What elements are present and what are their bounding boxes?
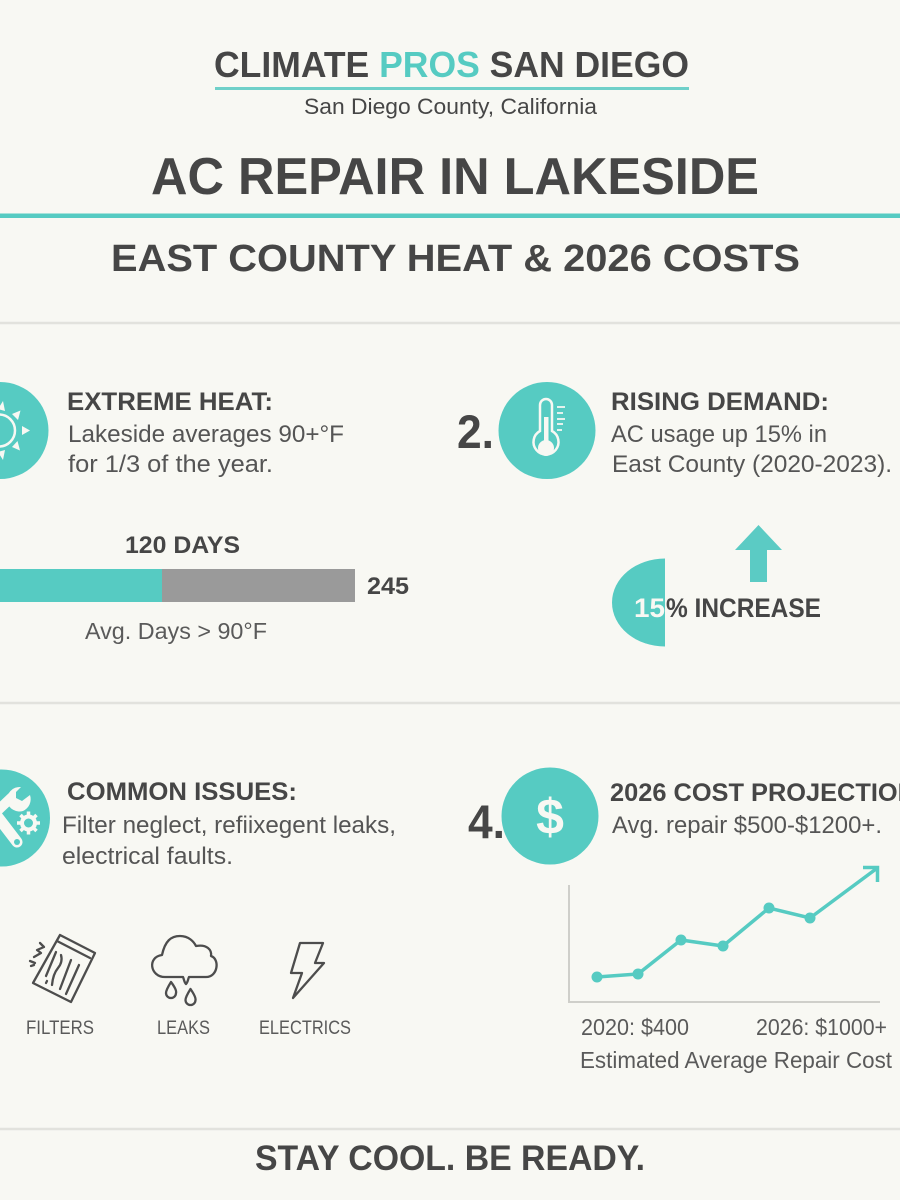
footer tagline: STAY COOL. BE READY. xyxy=(255,1139,645,1178)
body text: Filter neglect, refiixegent leaks, xyxy=(62,812,396,839)
header: brand block xyxy=(214,44,689,119)
body text: electrical faults. xyxy=(62,843,233,870)
label: 15% increase: % INCREASE xyxy=(666,593,821,623)
chart labels: 2020: $400 xyxy=(581,1014,689,1040)
icon: wrench and gear xyxy=(0,770,50,866)
icon: dollar: $ xyxy=(536,789,564,845)
bar chart: days above 90F: 245 xyxy=(367,573,409,600)
number 2: 2. xyxy=(457,405,494,458)
body text: AC usage up 15% in xyxy=(611,421,827,448)
body text: Lakeside averages 90+°F xyxy=(68,421,344,448)
body text: East County (2020-2023). xyxy=(612,451,892,478)
icon: sun xyxy=(0,382,48,479)
body text xyxy=(62,812,396,870)
body text: Avg. repair $500-$1200+. xyxy=(612,812,882,839)
icon: lightning bolt xyxy=(291,943,324,998)
arrow: increase xyxy=(735,525,782,582)
icon: thermometer xyxy=(498,382,596,479)
icon labels xyxy=(26,1018,351,1039)
bar chart: days above 90F: 120 DAYS xyxy=(125,532,240,559)
heading: RISING DEMAND: xyxy=(611,388,829,416)
half-disc: 15 percent xyxy=(612,558,665,646)
body text: for 1/3 of the year. xyxy=(68,451,273,478)
brand name: CLIMATE PROS SAN DIEGO xyxy=(214,44,689,85)
heading: COMMON ISSUES: xyxy=(67,778,297,806)
bar chart: days above 90F: Avg. Days > 90°F xyxy=(85,618,267,644)
secondary title: EAST COUNTY HEAT & 2026 COSTS xyxy=(111,238,800,280)
icon labels: ELECTRICS xyxy=(259,1018,351,1039)
brand underline xyxy=(215,87,689,90)
panel: common issues xyxy=(0,770,396,1039)
icon labels: LEAKS xyxy=(157,1018,210,1039)
label: 15% increase: 15 xyxy=(634,593,665,623)
icon: cloud with drops xyxy=(152,936,217,1005)
chart labels xyxy=(580,1014,893,1073)
body text xyxy=(611,421,892,478)
chart labels: Estimated Average Repair Cost xyxy=(580,1047,893,1073)
heading: EXTREME HEAT: xyxy=(67,388,273,416)
icon: dollar xyxy=(502,768,598,864)
panel: 2026 cost projection xyxy=(468,768,900,1073)
bar chart: days above 90F xyxy=(0,532,409,644)
icon: filter xyxy=(30,935,95,1002)
title divider xyxy=(0,214,900,218)
chart labels: 2026: $1000+ xyxy=(756,1014,887,1040)
icon labels: FILTERS xyxy=(26,1018,94,1039)
panel: rising demand xyxy=(457,382,892,646)
number 4: 4. xyxy=(468,795,505,848)
body text xyxy=(68,421,344,478)
main title: AC REPAIR IN LAKESIDE xyxy=(151,148,759,206)
location subtitle: San Diego County, California xyxy=(304,94,598,119)
panel: extreme heat xyxy=(0,382,409,644)
line chart xyxy=(569,868,880,1002)
